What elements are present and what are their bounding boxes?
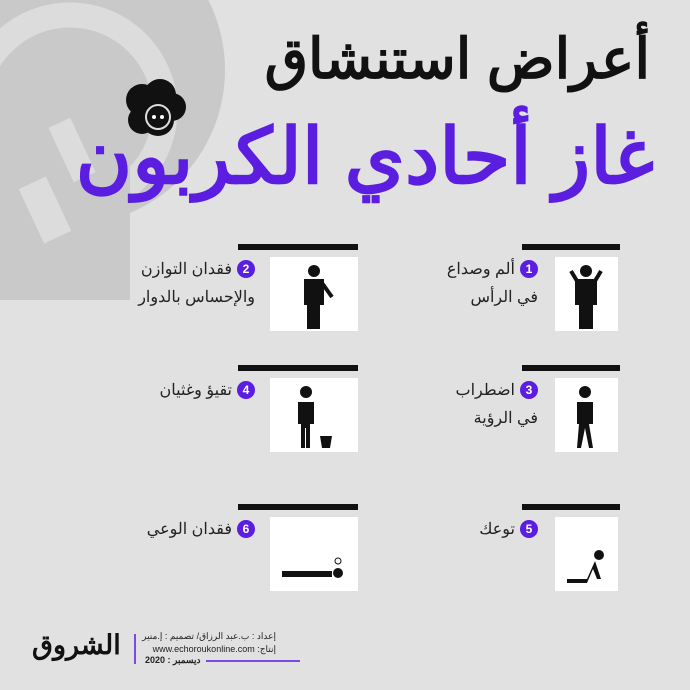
card 6: فقدان الوعي [147,521,232,538]
card 2 [138,244,358,331]
card 5: 5 [526,522,532,536]
card 3: اضطراب [456,382,515,399]
card 5 [479,504,620,591]
card 1 [447,244,620,331]
footer credits: إنتاج: www.echoroukonline.com [153,644,276,654]
card 2: فقدان التوازن [141,261,232,278]
footer credits [142,631,276,654]
card 3: 3 [526,383,532,397]
card 2: 2 [243,262,249,276]
card 4: 4 [243,383,249,397]
card 3: في الرؤية [474,410,538,427]
card 2: والإحساس بالدوار [138,289,255,306]
footer logo: الشروق [32,630,121,660]
title line 1: أعراض استنشاق [265,27,650,90]
card 6 [147,504,358,591]
footer credits: إعداد : ب.عبد الرزاق/ تصميم : إ.منير [142,631,276,641]
card 1: ألم وصداع [447,261,515,278]
icon: smoke skull [126,79,186,136]
card 4 [160,365,358,452]
card 1: في الرأس [470,289,538,306]
card 6: 6 [243,522,249,536]
footer divider [134,634,136,664]
footer date: ديسمبر : 2020 [145,655,200,665]
card 4: تقيؤ وغثيان [160,382,232,399]
card 1: 1 [526,262,532,276]
card 3 [456,365,620,452]
title line 2: غاز أحادي الكربون [76,114,654,200]
footer line [206,660,300,662]
card 5: توعك [479,521,515,538]
